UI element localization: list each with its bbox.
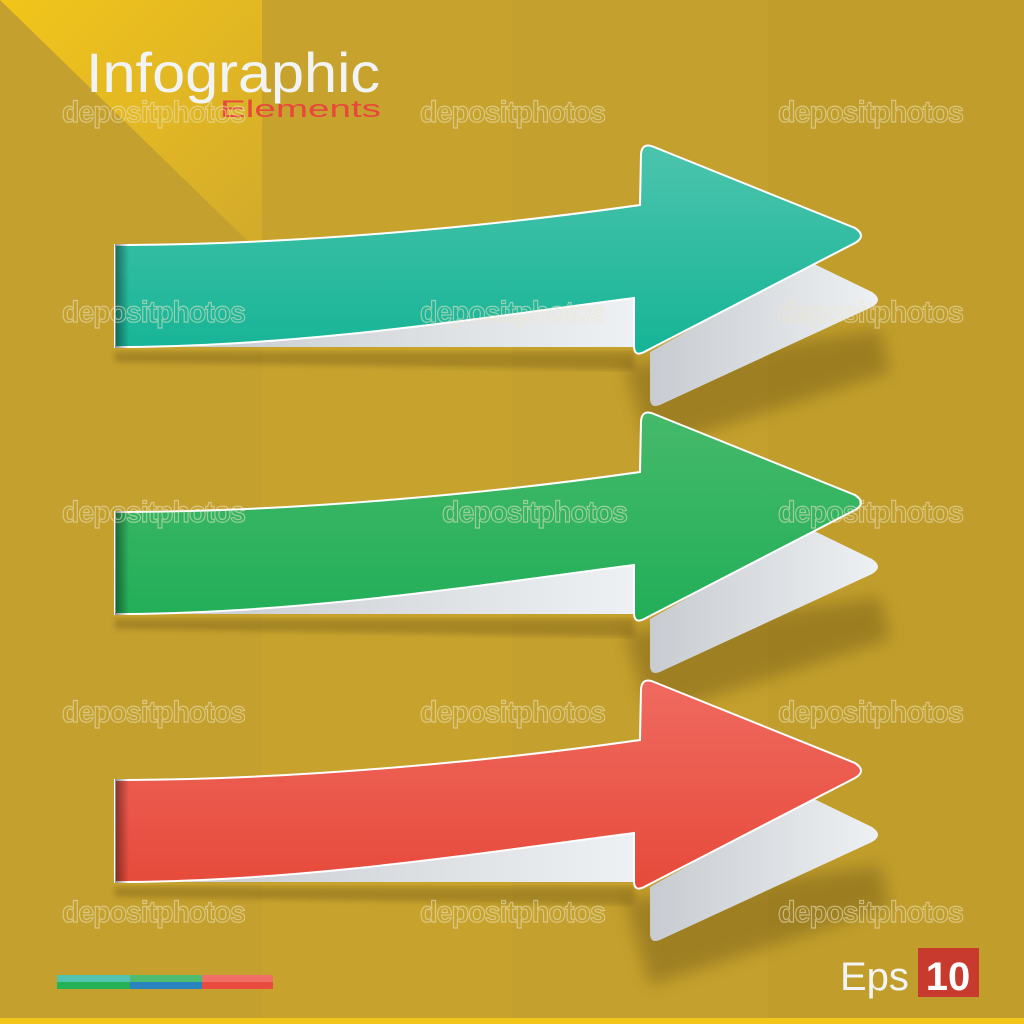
watermarks: depositphotos: [62, 96, 245, 129]
watermarks: depositphotos: [778, 296, 963, 329]
arrow: green: [115, 413, 890, 717]
watermarks: depositphotos: [62, 696, 245, 729]
watermarks: depositphotos: [778, 496, 963, 529]
color bar legend: [57, 975, 273, 989]
subtitle: Elements: [220, 96, 381, 123]
watermarks: depositphotos: [62, 896, 245, 929]
eps label: Eps: [840, 955, 909, 999]
watermarks: depositphotos: [420, 896, 605, 929]
watermarks: depositphotos: [62, 296, 245, 329]
arrow: red: [115, 681, 890, 985]
title: Infographic: [86, 41, 380, 104]
watermarks: depositphotos: [420, 296, 605, 329]
watermarks: depositphotos: [420, 96, 605, 129]
watermarks: [62, 96, 963, 929]
arrow: teal: [115, 146, 890, 450]
watermarks: depositphotos: [442, 496, 627, 529]
watermarks: depositphotos: [778, 896, 963, 929]
eps label: [840, 948, 979, 999]
watermarks: depositphotos: [62, 496, 245, 529]
eps label: 10: [926, 955, 970, 999]
watermarks: depositphotos: [778, 96, 963, 129]
watermarks: depositphotos: [778, 696, 963, 729]
watermarks: depositphotos: [420, 696, 605, 729]
